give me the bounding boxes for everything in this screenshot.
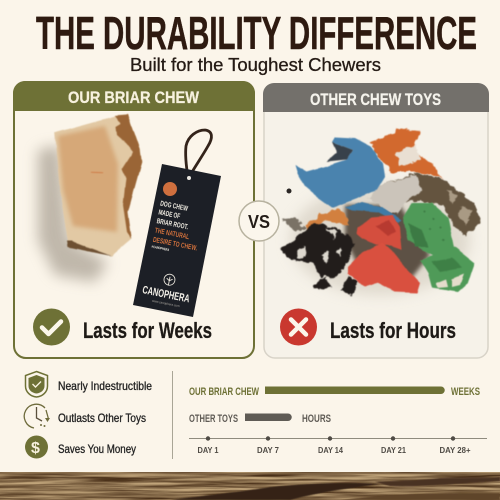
bar: our briar chew: WEEKS: [451, 386, 480, 398]
time axis: DAY 7: [257, 445, 279, 455]
briar chew block: [38, 115, 142, 282]
toy pile shadow: [290, 185, 470, 295]
green toy: [403, 203, 475, 292]
panel header: other chew toys: OTHER CHEW TOYS: [310, 90, 441, 109]
tag copy: THE NATURAL: [154, 225, 191, 241]
time axis: DAY 21: [381, 445, 406, 455]
stray crumb: [286, 188, 292, 194]
divider: [172, 371, 173, 459]
bar: other toys: HOURS: [302, 413, 331, 425]
tag copy: [151, 199, 205, 257]
orange rope: [370, 128, 442, 177]
bar: other toys: OTHER TOYS: [189, 413, 238, 425]
panel: other chew toys: [263, 83, 489, 358]
timeline chart: [189, 386, 487, 455]
pile base shadow: [345, 205, 430, 280]
benefit: saves you money: Saves You Money: [58, 442, 136, 456]
tag copy: BRIAR ROOT.: [156, 216, 189, 231]
red toy: [348, 215, 420, 293]
benefit: nearly indestructible: Nearly Indestructible: [58, 379, 152, 393]
bar: our briar chew: [189, 386, 480, 398]
vs badge: [239, 201, 279, 241]
panel header: other chew toys: [263, 83, 489, 112]
lasts for weeks label: Lasts for Weeks: [83, 318, 212, 343]
tag copy: DESIRE TO CHEW.: [152, 235, 198, 252]
panel header: our briar chew: [13, 81, 255, 111]
time axis: DAY 1: [198, 445, 219, 455]
panel: our briar chew: [13, 81, 255, 358]
tag copy: #CANOPHERA: [151, 245, 170, 252]
icon: cross: [280, 308, 317, 346]
tag logo: www.canophera.com: [152, 299, 180, 308]
icon: shield: [26, 372, 48, 397]
bar: our briar chew: OUR BRIAR CHEW: [189, 386, 259, 398]
icon: dollar: $: [31, 440, 40, 457]
benefit: outlasts other toys: Outlasts Other Toys: [58, 411, 146, 425]
lasts for hours label: Lasts for Hours: [330, 318, 456, 343]
time axis: [189, 436, 487, 455]
hang tag: [133, 130, 221, 317]
bar: other toys: [189, 413, 331, 425]
blue toy: [295, 137, 402, 223]
time axis: DAY 28+: [440, 445, 471, 455]
vs badge: VS: [248, 212, 270, 232]
benefits list: [24, 372, 152, 458]
pile of destroyed toys: [280, 128, 480, 297]
orange scraps: [283, 208, 350, 232]
icon: clock: [24, 404, 50, 428]
icon: check: [33, 308, 70, 346]
tag logo: [140, 270, 194, 310]
tag copy: MADE OF: [158, 207, 181, 221]
multicolour rope: [368, 173, 480, 235]
tag logo: CANOPHERA: [141, 284, 191, 305]
time axis: DAY 14: [318, 445, 343, 455]
tag copy: DOG CHEW: [159, 199, 189, 213]
black debris: [280, 223, 358, 297]
panel header: our briar chew: OUR BRIAR CHEW: [68, 88, 200, 107]
wood strip: [0, 472, 500, 500]
subtitle: Built for the Toughest Chewers: [130, 55, 381, 75]
